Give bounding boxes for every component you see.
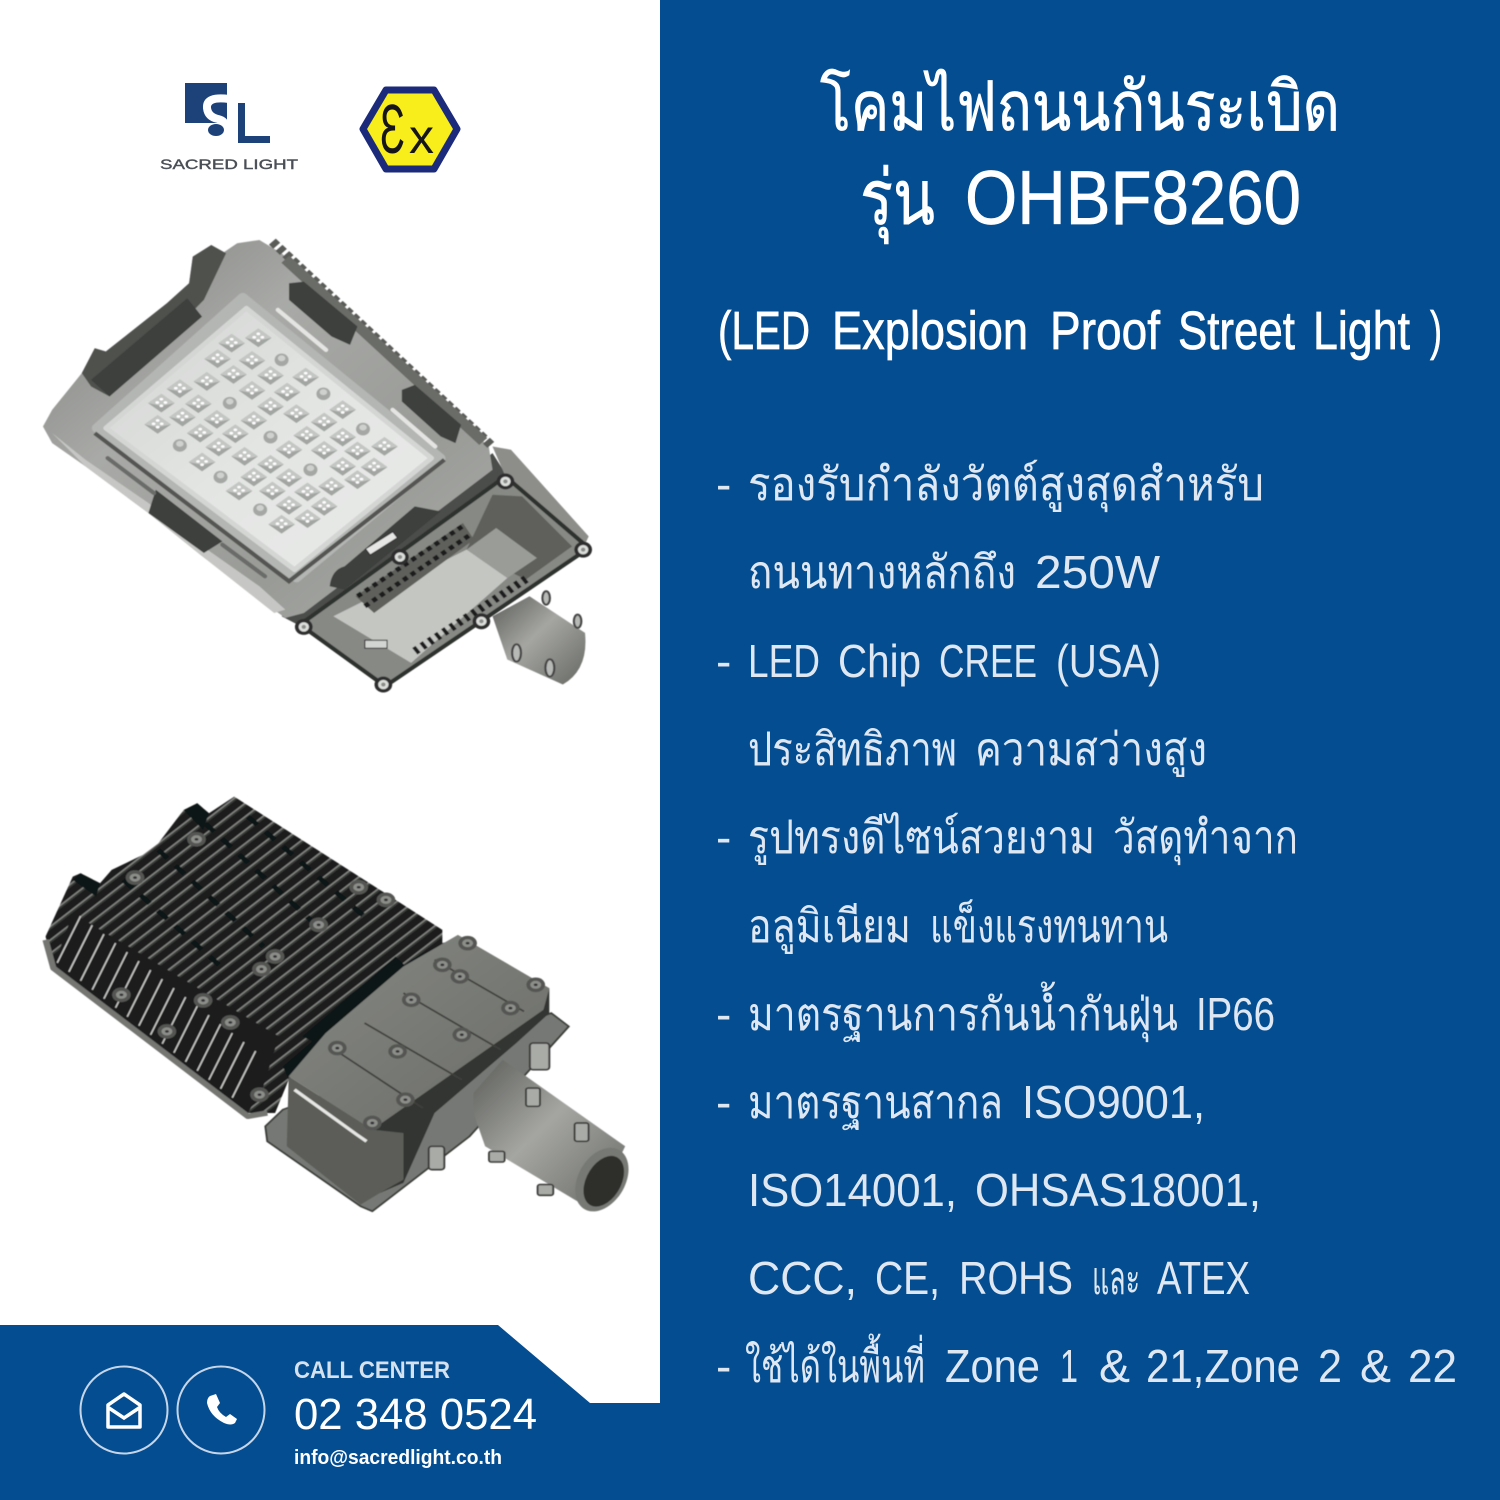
product photo: street light rear heat sink (46, 797, 639, 1218)
bullet: design and material (716, 811, 1298, 954)
bullet: certifications: ISO9001, (1022, 1076, 1205, 1128)
bullet: certifications: และ (1092, 1252, 1140, 1304)
icon: Ex explosion-proof mark: x (409, 111, 434, 164)
bullet: design and material: วัสดุทำจาก (1113, 811, 1298, 866)
bullet: LED chip: (USA) (1056, 635, 1161, 687)
subtitle: English product name: Proof (1050, 301, 1161, 361)
icon: Ex explosion-proof mark (363, 90, 457, 169)
bullet: maximum wattage: รองรับกำลังวัตต์สูงสุดสำหรับ (748, 458, 1264, 513)
bullet: design and material: - (716, 811, 731, 863)
bullet: LED chip: LED (748, 635, 820, 687)
bullet: hazardous zones: & (1099, 1340, 1130, 1392)
bullet: LED chip: CREE (939, 635, 1037, 687)
icon: Ex explosion-proof mark: Ɛ (380, 90, 405, 168)
title: model number: รุ่น (860, 156, 935, 244)
title: Thai product name: โคมไฟถนนกันระเบิด (820, 68, 1340, 145)
bullet: hazardous zones (716, 1333, 1457, 1392)
bullet: certifications: ATEX (1157, 1252, 1250, 1304)
bullet: certifications: CCC, (748, 1252, 857, 1304)
icon: envelope home circle (80, 1366, 168, 1454)
title: model number: OHBF8260 (965, 156, 1301, 241)
bullet: IP rating: มาตรฐานการกันน้ำกันฝุ่น (748, 981, 1178, 1043)
bullet: design and material: อลูมิเนียม (748, 900, 911, 954)
panel: contact footer (0, 1325, 660, 1500)
bullet: certifications: ISO14001, (748, 1164, 957, 1216)
bullet: maximum wattage: 250W (1035, 546, 1161, 598)
bullet: certifications: มาตรฐานสากล (748, 1076, 1003, 1130)
bullet: LED chip: ความสว่างสูง (975, 723, 1207, 777)
list: feature bullets (716, 458, 1457, 1392)
bullet: maximum wattage (716, 458, 1264, 598)
text: phone number: 02 348 0524 (294, 1390, 537, 1439)
bullet: IP rating: IP66 (1196, 988, 1275, 1040)
bullet: hazardous zones: 1 (1060, 1340, 1078, 1392)
bullet: certifications: OHSAS18001, (975, 1164, 1261, 1216)
bullet: certifications: ROHS (959, 1252, 1073, 1304)
subtitle: English product name: Light (1313, 301, 1410, 361)
bullet: hazardous zones: - (716, 1340, 731, 1392)
icon: phone circle (178, 1366, 264, 1454)
bullet: certifications: CE, (875, 1252, 940, 1304)
bullet: LED chip (716, 635, 1207, 777)
bullet: design and material: รูปทรงดีไซน์สวยงาม (748, 811, 1095, 865)
bullet: design and material: แข็งแรงทนทาน (930, 899, 1168, 952)
bullet: LED chip: ประสิทธิภาพ (748, 723, 957, 775)
product photo: street light front (43, 240, 592, 693)
bullet: IP rating: - (716, 988, 731, 1040)
subtitle: English product name: (LED (718, 301, 810, 361)
bullet: certifications: - (716, 1076, 731, 1128)
bullet: maximum wattage: ถนนทางหลักถึง (748, 546, 1016, 598)
bullet: certifications (716, 1076, 1261, 1304)
logo: Sacred Light: SACRED LIGHT (160, 156, 299, 172)
logo: Sacred Light (160, 83, 299, 172)
text: email: info@sacredlight.co.th (294, 1447, 502, 1469)
bullet: hazardous zones: 21,Zone (1146, 1340, 1300, 1392)
panel: white left column (0, 0, 660, 1500)
subtitle: English product name: Explosion (832, 301, 1028, 361)
bullet: hazardous zones: & (1360, 1340, 1391, 1392)
text: call center: CALL CENTER (294, 1357, 450, 1384)
subtitle: English product name: Street (1178, 301, 1295, 361)
bullet: hazardous zones: 2 (1318, 1340, 1342, 1392)
bullet: LED chip: Chip (838, 635, 921, 687)
bullet: LED chip: - (716, 635, 731, 687)
bullet: hazardous zones: Zone (945, 1340, 1040, 1392)
bullet: maximum wattage: - (716, 458, 731, 510)
panel: blue specification column (660, 0, 1500, 1500)
subtitle: English product name: ) (1430, 301, 1442, 361)
bullet: hazardous zones: 22 (1408, 1340, 1457, 1392)
bullet: hazardous zones: ใช้ได้ในพื้นที่ (745, 1333, 925, 1392)
